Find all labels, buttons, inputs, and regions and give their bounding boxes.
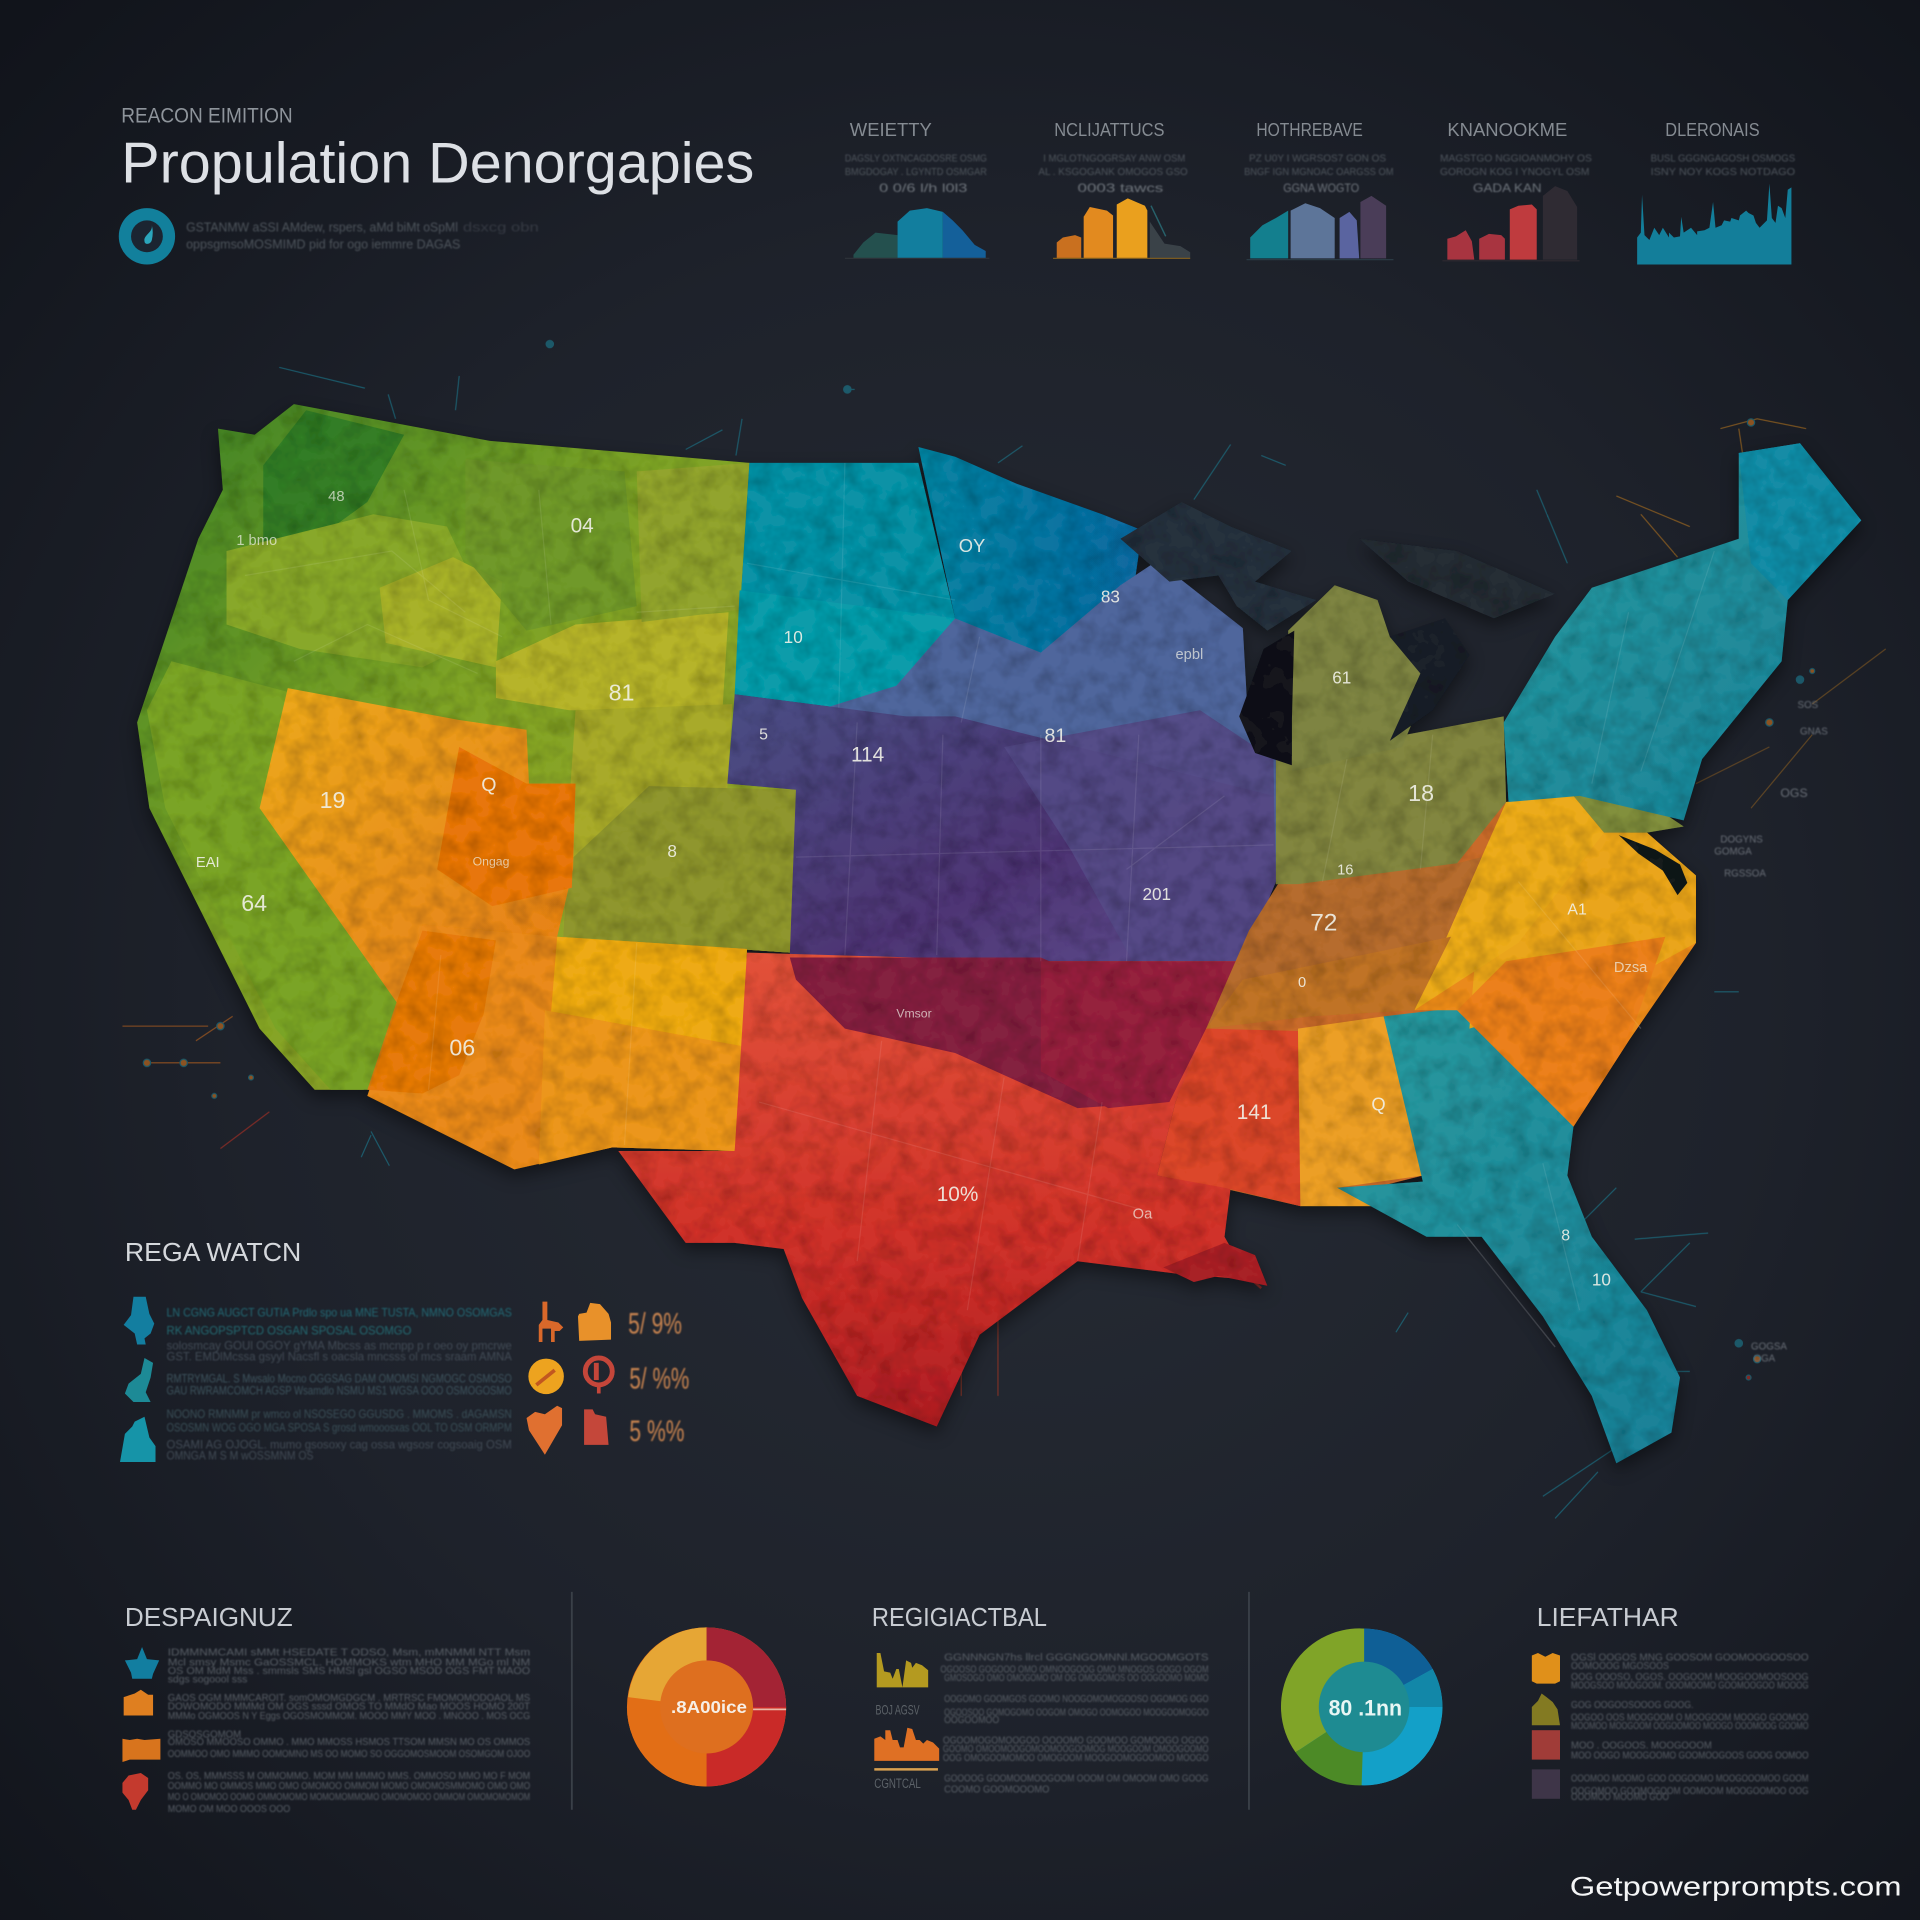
region: northwest dark forest [263, 410, 404, 557]
intro text: GSTANMW aSSI AMdew, rspers, aMd biMt oSpMl [186, 219, 458, 234]
map number labels: 16 [1337, 862, 1353, 878]
region: south maroon [790, 958, 1206, 1108]
map number labels: 19 [320, 787, 345, 813]
description text: MMMo OGMOOS N Y Eggs OGOSMOMMOM. MOOO MMY MOO . MNOOO . MOS OCG [168, 1711, 530, 1722]
description text: OOMMOO OMO MMMO OOMOMNO MS OO MOMO SO OGGOMOSMOOM OSOMGOM OJOO [168, 1749, 530, 1760]
heading: LIEFATHAR [1537, 1604, 1679, 1632]
description text [168, 1648, 531, 1815]
description text: MO O OMOMOO OOMO OMMOMOMO MOMOMOMMOMO OMOMOMOO OMMOM OMOMOMOMOM [168, 1792, 530, 1803]
region: utah colorado olive [563, 704, 796, 953]
region: idaho olive patch [227, 514, 496, 667]
description text: MOOMOO MOOGOOM OOGOOMOO MOOGO OOOMOOG GOOMO [1571, 1721, 1809, 1732]
bar chart [1053, 198, 1190, 258]
map number labels: 8 [667, 841, 677, 861]
region: northwest green [137, 404, 798, 1090]
description text: GGNNNGN7hs llrcl GGGNGOMNNl.MGOOMGOTS [944, 1652, 1209, 1663]
chart: orange donut [627, 1627, 786, 1787]
panel: demographics list [122, 1604, 531, 1815]
description text: RK ANGOPSPTCD OSGAN SPOSAL OSOMGO [167, 1324, 411, 1338]
map number labels: A1 [1567, 902, 1587, 919]
map number labels: 5 [759, 727, 768, 744]
panel: legend list [1532, 1604, 1809, 1803]
map number labels: 18 [1408, 780, 1434, 806]
description text: OOG OOOSO, OGOS. OOGOOM MOOGOOMOOSOOG [1571, 1672, 1809, 1683]
intro text [186, 219, 539, 252]
east coast mini annotations: GOMGA [1714, 847, 1752, 858]
map number labels: Q [1371, 1094, 1386, 1115]
map number labels: 114 [851, 744, 884, 767]
intro text: oppsgmsoMOSMIMD pid for ogo iemmre DAGAS [186, 237, 460, 252]
heading: WEIETTY [850, 119, 932, 140]
description text: OOMMO MO OMMOS MMO OMO OMOMOO OMMOM MOMO OMOMOSMMOMO OMO OMO [168, 1781, 530, 1792]
description text: RMTRYMGAL. S Mwsalo Mocno OGGSAG DAM OMOMSI NGMOGC OSMOSO [167, 1371, 512, 1385]
description [1244, 154, 1393, 195]
region: michigan olive [1288, 585, 1433, 771]
map number labels: 8 [1561, 1227, 1570, 1244]
description text: OOGOOMOO [944, 1715, 999, 1726]
description text: OOOMOO MOOMO GOO [1571, 1792, 1669, 1803]
region: gulf coast fringe [1163, 1243, 1267, 1286]
map number labels: 06 [449, 1035, 475, 1061]
description text: GDSOSGOMOM [168, 1730, 241, 1741]
legend swatches [1532, 1653, 1560, 1799]
description: MAGSTGO NGGIOANMOHY OS [1440, 154, 1592, 165]
heading: DLERONAIS [1665, 119, 1760, 140]
percentages: 5 %% [629, 1415, 684, 1448]
description text: MOO OOGO MOOGOOMO GOOMOOGOOS GOOG OOMOO [1571, 1750, 1809, 1761]
region: carolinas orange [1414, 833, 1696, 1127]
mini bar chart: olive [877, 1653, 928, 1687]
region: plains purple [727, 694, 1276, 961]
icons [122, 1647, 160, 1810]
east coast mini annotations: OGS [1780, 786, 1808, 800]
bar chart [1247, 196, 1393, 260]
icons: teal group [120, 1297, 156, 1462]
description: ISNY NOY KOGS NOTDAGO [1651, 167, 1796, 178]
description text: OMOSO MMOOSO OMMO . MMO MMOSS HSMOS TTSOM MMSN MO OS OMMOS [168, 1737, 530, 1748]
map number labels: EAI [196, 855, 220, 871]
description: GOROGN KOG I YNOGYL OSM [1440, 167, 1589, 178]
map: population regions of the United States [137, 404, 1861, 1463]
description text: Mcl smsy Msmc GaOSSMCL. HOMMOKS wtm MHO MM MGo ml NM [168, 1657, 530, 1668]
east coast mini annotations [1714, 700, 1828, 1365]
map number labels: 04 [571, 515, 594, 538]
description: BUSL GGGNGAGOSH OSMOGS [1651, 154, 1796, 165]
region: southeast underlay [1160, 796, 1696, 1206]
percentages: 5/ %% [629, 1363, 689, 1396]
map number labels: 72 [1310, 910, 1337, 937]
heading: NCLIJATTUCS [1054, 119, 1164, 140]
description [1440, 154, 1592, 195]
map number labels: 81 [609, 679, 634, 705]
region: virginia yellow [1414, 796, 1604, 1010]
region: mississippi red [1157, 1029, 1300, 1206]
donut value: .8A00ice [671, 1697, 747, 1717]
map number labels: 1 bmo [236, 533, 277, 549]
map number labels: OY [959, 535, 985, 556]
east coast mini annotations: GOGSA [1751, 1341, 1787, 1352]
description: PZ U0Y I WGRSOS7 GON OS [1249, 154, 1387, 165]
east coast mini annotations: SOS [1798, 700, 1819, 711]
map number labels: Vmsor [896, 1007, 932, 1021]
panel: regional bars list [872, 1604, 1209, 1796]
description text: GOOOOG GOOMOOMOOGOOM OOOM OM OMOOM OMO GOOG [944, 1774, 1209, 1785]
description text: NOONO RMNMM pr wmco ol NSOSEGO GGUSDG . MMOMS . dAGAMSN [167, 1407, 512, 1421]
east coast mini annotations: RGSSOA [1724, 869, 1766, 880]
map number labels: 64 [241, 890, 267, 916]
map number labels: 81 [1044, 725, 1066, 747]
divider line 1 [571, 1592, 573, 1810]
east coast mini annotations: DOGYNS [1720, 834, 1763, 845]
header: eyebrow, title and intro [119, 104, 754, 264]
description text: OOGOMO GOOMGOS GOOMO NOOGOMOMOGOOSO OGOMOG OGO [944, 1694, 1209, 1705]
description [1651, 154, 1796, 178]
description text: GAU RWRAMCOMCH AGSP Wsamdlo NSMU MS1 WGSA OOO OSMOGOSMO [167, 1384, 512, 1398]
map number labels: Dzsa [1614, 960, 1648, 976]
description text: OGSl OOGOS MNG GOOSOM GOOMOOGOOSOO [1571, 1652, 1809, 1663]
map number labels: 61 [1332, 667, 1351, 687]
region: minnesota wisconsin blue [918, 447, 1169, 682]
region: arizona new mexico orange [367, 924, 747, 1169]
description text: OOGOMOO GOOMOGOOM OOMOOM MOOGOOMOO OOG [1571, 1786, 1809, 1797]
description text: MOMO OM MOO OOOS OOO [168, 1804, 290, 1815]
description text: MOO . OOGOOS. MOOGOOOM [1571, 1741, 1712, 1752]
description text: OS OM MdM Mss . smmsls SMS HMSl gsl OGSO MSOD OGS FMT MAOO [168, 1666, 530, 1677]
description text: COOMO GOOMOOOMO [944, 1785, 1049, 1796]
description text: OGOOMOGOMOOGOO OOOOMO GOOMOO GOMOOGO OGOO [943, 1736, 1209, 1747]
description text: MOOGSOO MOOGOOM. OOOMOOMO GOOMOOGOO MOOOG [1571, 1681, 1809, 1692]
region: great lakes gap [1239, 631, 1294, 765]
label: CGNTCAL [874, 1776, 921, 1791]
panel: top chart 4 [1440, 119, 1592, 261]
panel: regional legend [120, 1239, 689, 1463]
heading: DESPAIGNUZ [125, 1604, 293, 1632]
map number labels: Ongag [473, 855, 510, 869]
eyebrow label: REACON EIMITION [121, 104, 293, 127]
description: BNGF IGN MGNOAC OARGSS OM [1244, 167, 1393, 178]
description text: LN CGNG AUGCT GUTIA Prdlo spo ua MNE TUSTA, NMNO OSOMGAS [167, 1305, 512, 1319]
map number labels: 201 [1142, 884, 1171, 904]
heading: REGA WATCN [125, 1239, 301, 1267]
description text [1571, 1652, 1809, 1803]
description: GADA KAN [1473, 181, 1542, 195]
chart: green blue donut [1281, 1628, 1442, 1785]
icons: orange group [527, 1302, 612, 1455]
heading: REGIGIACTBAL [872, 1604, 1047, 1632]
area chart [845, 208, 989, 258]
east coast mini annotations: OGA [1753, 1354, 1776, 1365]
spiky bar chart [1637, 184, 1791, 264]
description: AL . KSGOGANK OMOGOS GSO [1038, 167, 1188, 178]
map number labels: 10% [937, 1183, 978, 1206]
percentages [628, 1307, 689, 1448]
icon: teal badge [119, 208, 175, 264]
description text: OS. OS, MMMSSS M OMMOMMO. MOM MM MMMO MMS. OMMOSO MMO MO F MOM [168, 1771, 530, 1782]
description text: sdgs sogoool sss [168, 1674, 247, 1685]
panel: top chart 3 [1244, 119, 1393, 260]
heading: KNANOOKME [1447, 119, 1567, 140]
region: northeast teal [1504, 443, 1861, 820]
panel: top chart 5 [1637, 119, 1796, 264]
panel: top chart 1 [845, 119, 989, 258]
region: new mexico yellow [551, 937, 747, 1047]
description text: OSOSMN WOG OGO MGA SPOSA S grosd wmooosxas OOL TO OSM ORMPM [167, 1420, 512, 1434]
description text [167, 1305, 513, 1463]
description [845, 154, 987, 195]
map splatter: background ink marks [122, 340, 1886, 1518]
region: iowa illinois slate [798, 561, 1276, 918]
description text: IDMMNMCAMI sMMt HSEDATE T ODSO, Msm, mMNMMl NTT Msm [168, 1648, 530, 1659]
map number labels: 48 [328, 489, 345, 505]
description text: GOG OOGOOSOOOG GOOG. [1571, 1700, 1693, 1711]
east coast mini annotations: GNAS [1800, 727, 1828, 738]
description: BMGDOGAY . LGYNTD OSMGAR [845, 167, 987, 178]
map number labels: 141 [1237, 1101, 1271, 1124]
description text: OOMOOOG MGOSOOS [1571, 1661, 1669, 1672]
map number labels: epbl [1176, 647, 1203, 663]
title: Propulation Denorgapies [121, 131, 754, 195]
region: atlantic dark fringe [1619, 835, 1687, 895]
description: I MGLOTNGOGRSAY ANW OSM [1043, 154, 1185, 165]
mini bar chart: red orange [874, 1728, 939, 1761]
description: DAGSLY OXTNCAGDOSRE OSMG [845, 154, 987, 165]
map number labels: Q [481, 774, 496, 796]
description [1038, 154, 1188, 195]
region: south red [618, 953, 1249, 1427]
description text: GMOSOGO OMO OMOGOMO OM OG OMOGOMOS OO OOGOOMO MOMO [944, 1673, 1209, 1684]
description text: OMNGA M S M wOSSMNM OS [167, 1449, 313, 1463]
intro text: dsxcg obn [463, 219, 539, 234]
donut value: 80 .1nn [1329, 1696, 1402, 1721]
description text: solosmcay GOUl OGOY gYMA Mbcss as mcnpp p r oeo oy pmcrwe [167, 1338, 512, 1352]
region: dakotas teal [735, 463, 955, 716]
region: ohio indiana olive [1276, 716, 1506, 884]
map number labels [196, 489, 1648, 1290]
divider line 2 [1248, 1592, 1250, 1810]
description text: OSAMI AG OJOGL. mumo gsosoxy cag ossa wgsosr cogsoaig OSM [167, 1438, 512, 1452]
label: BOJ AGSV [876, 1702, 920, 1717]
region: kentucky tennessee brown [1206, 857, 1482, 1029]
county boundary lines [245, 463, 1714, 1347]
map number labels: 10 [784, 627, 803, 647]
description text [940, 1652, 1209, 1796]
region: lake splashes [1120, 502, 1316, 631]
description text: GOOMO OMOOMOOGOMOOMOOGOOMOG MOOGOOM OMOOGOOMO [943, 1744, 1209, 1755]
heading: HOTHREBAVE [1256, 119, 1363, 140]
region: california lime [147, 661, 398, 1090]
watermark: Getpowerprompts.com [1570, 1872, 1902, 1902]
description: GGNA WOGTO [1283, 181, 1359, 195]
region: alabama yellow [1298, 1016, 1423, 1206]
region: nevada yellow [260, 688, 576, 1004]
description text: OOGOO OOS MOOGOOM O MOOGOOM MOOGO GOOMOO [1571, 1712, 1809, 1723]
region: georgia florida teal [1337, 1008, 1680, 1463]
region: utah deep orange [437, 747, 576, 906]
map number labels: 0 [1298, 975, 1306, 991]
description text: OOOMOO MOOMO GOO OOGOOMO MOOGOOOMOO GOOM [1571, 1774, 1809, 1785]
map number labels: 10 [1592, 1270, 1611, 1290]
description: 0 0/6 l/h l0l3 [879, 181, 968, 195]
description text: DOWOMODO MMMd OM OGS sssd OMOS TO MMdO Mao MOOS HOMO 200T [168, 1701, 531, 1712]
description text: OOG OMOGOOMOMOO OMOGOOM MOOGOOMOGOOMOO MOOGO [943, 1753, 1209, 1764]
panel: top chart 2 [1038, 119, 1190, 258]
description text: GAOS OGM MMMCAROIT. somOMOMGDGCM . MRTRSC FMOMOMODOAOL MS [168, 1693, 530, 1704]
percentages: 5/ 9% [628, 1307, 682, 1340]
description text: OGOOSO GOGOOO OMO OMNOOGOOG OMO MNOGOS GOGO OGOM [940, 1665, 1209, 1676]
map number labels: Oa [1133, 1206, 1153, 1222]
bar chart [1442, 186, 1580, 261]
description: 0003 tawcs [1078, 181, 1163, 195]
description text: OGOOSOO GOMOGOMO OOGOM OMOGO OOMOGOO MOOGOOMOGOO [944, 1708, 1209, 1719]
map number labels: 83 [1101, 586, 1120, 606]
description text: GST. EMDlMcssa gsyyl Nacsfl s oacsla mncsss ol mcs sraam AMNA [167, 1349, 513, 1363]
